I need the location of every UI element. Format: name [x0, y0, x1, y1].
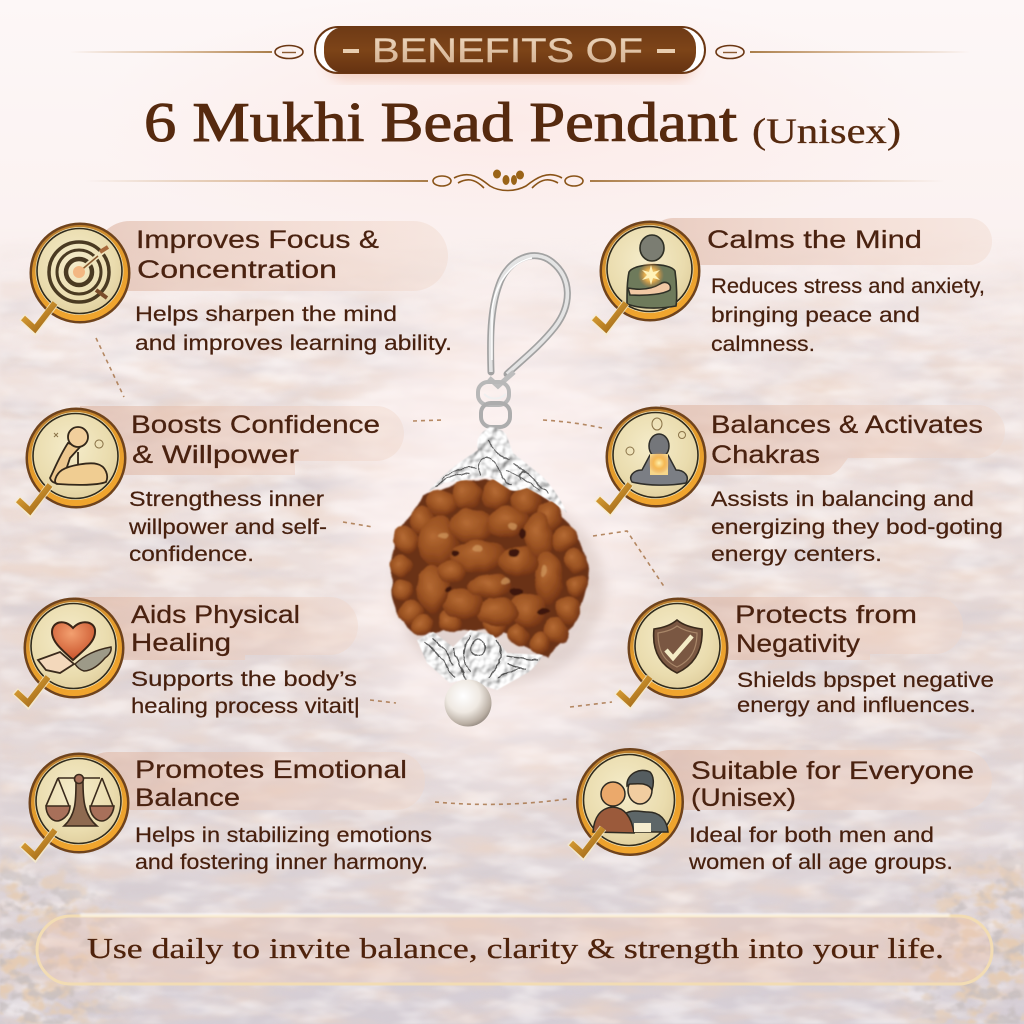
benefit: emotional balance	[22, 752, 432, 874]
benefit: chakras	[597, 405, 1005, 566]
unisex subtitle: (Unisex)	[752, 111, 901, 151]
checkmark	[15, 677, 48, 704]
benefit: protection	[617, 597, 994, 717]
checkmark	[593, 303, 626, 330]
heading: (Unisex)	[691, 784, 796, 812]
heading: Improves Focus &	[136, 226, 379, 254]
heading	[136, 226, 379, 284]
top silver cap	[428, 427, 567, 513]
heading: Boosts Confidence	[131, 411, 380, 439]
heading	[711, 411, 983, 469]
heading	[131, 601, 300, 657]
heading pill	[95, 221, 448, 291]
footer callout banner	[37, 913, 992, 984]
description: and fostering inner harmony.	[135, 851, 428, 874]
heading: Protects from	[735, 601, 917, 629]
description	[135, 824, 432, 874]
description: confidence.	[129, 543, 254, 566]
checkmark	[22, 303, 55, 330]
description: Assists in balancing and	[711, 488, 974, 511]
heading: Concentration	[137, 256, 337, 284]
heading pill	[640, 750, 992, 810]
heading: & Willpower	[132, 441, 299, 469]
description: women of all age groups.	[688, 851, 953, 874]
pearl drop	[444, 680, 492, 726]
description: energizing they bod-goting	[711, 516, 1003, 539]
description	[135, 303, 452, 355]
description: Shields bpspet negative	[737, 669, 994, 692]
heading	[135, 756, 407, 812]
pendant wire loop	[478, 256, 567, 427]
heading: Calms the Mind	[707, 226, 922, 254]
icon: heart in hands	[24, 598, 124, 698]
benefit: improves focus	[22, 221, 452, 355]
dashed connector lines	[96, 338, 665, 804]
benefits of banner: BENEFITS OF	[372, 32, 643, 70]
benefit: suitable for everyone	[570, 748, 992, 874]
description: Helps sharpen the mind	[135, 303, 397, 326]
benefit: calms the mind	[593, 218, 992, 356]
heading	[691, 757, 974, 812]
icon: flexed arm	[26, 408, 126, 508]
icon: scales	[28, 752, 130, 854]
bottom silver cap	[417, 630, 543, 690]
checkmark	[597, 484, 630, 511]
description	[688, 824, 953, 874]
top ornament lines	[70, 46, 970, 58]
description: energy centers.	[711, 543, 882, 566]
heading pill	[650, 218, 992, 265]
description: Strengthess inner	[129, 488, 324, 511]
description: Helps in stabilizing emotions	[135, 824, 432, 847]
heading: Balances & Activates	[711, 411, 983, 439]
heading: Aids Physical	[131, 601, 300, 629]
title divider ornament	[85, 170, 945, 190]
heading: Negativity	[736, 630, 861, 658]
heading: Suitable for Everyone	[691, 757, 974, 785]
description: calmness.	[711, 333, 815, 356]
heading pill	[75, 597, 358, 660]
description: willpower and self-	[128, 516, 327, 539]
heading: Promotes Emotional	[135, 756, 407, 784]
benefit: confidence	[17, 406, 404, 566]
heading	[735, 601, 917, 658]
benefit: physical healing	[15, 597, 360, 718]
title header	[70, 27, 970, 190]
heading pill	[80, 406, 404, 475]
checkmark	[570, 828, 603, 855]
description: bringing peace and	[711, 304, 920, 327]
description	[737, 669, 994, 717]
icon: meditating figure	[606, 406, 706, 508]
description: Supports the body’s	[131, 668, 357, 691]
checkmark	[17, 485, 50, 512]
icon: man and woman	[576, 748, 684, 856]
icon: shield	[628, 598, 728, 698]
icon: target	[30, 222, 130, 324]
heading: Healing	[131, 629, 231, 657]
description	[711, 488, 1003, 566]
heading pill	[680, 597, 963, 660]
description: and improves learning ability.	[135, 332, 452, 355]
heading pill	[660, 405, 1005, 475]
description: Ideal for both men and	[689, 824, 934, 847]
description	[131, 668, 360, 718]
description: energy and influences.	[737, 694, 976, 717]
heading: Balance	[135, 784, 240, 812]
description: healing process vitait|	[131, 695, 360, 718]
description: Reduces stress and anxiety,	[711, 275, 985, 298]
heading	[131, 411, 380, 469]
main title: 6 Mukhi Bead Pendant	[144, 92, 738, 154]
bead body	[390, 480, 588, 657]
description	[711, 275, 985, 356]
heading pill	[80, 752, 425, 810]
pendant with rudraksha bead	[390, 256, 605, 726]
benefits of banner	[315, 27, 705, 80]
description	[128, 488, 327, 566]
icon: calm person	[600, 220, 700, 322]
checkmark	[22, 830, 55, 857]
checkmark	[617, 677, 650, 704]
footer callout banner: Use daily to invite balance, clarity & strength into your life.	[87, 933, 944, 965]
heading: Chakras	[711, 441, 820, 469]
